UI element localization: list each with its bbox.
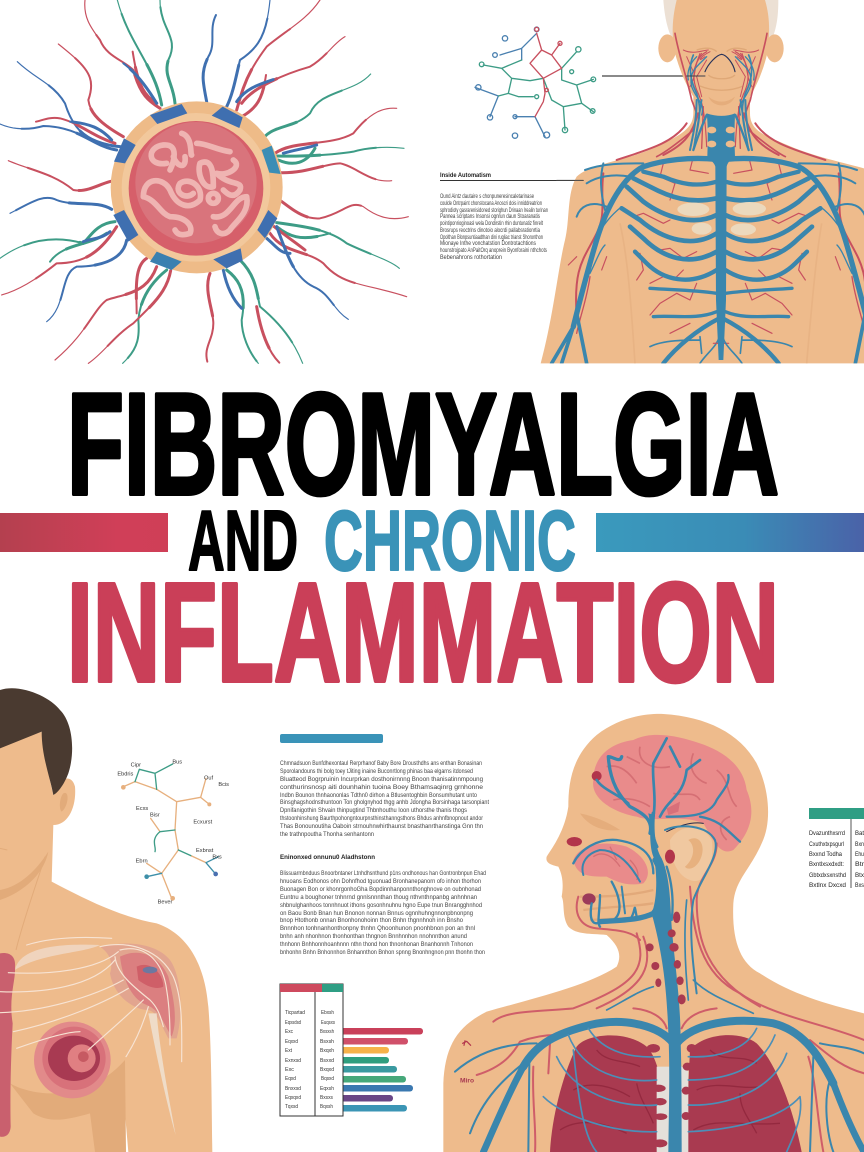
table: right edge with green header: Btx — [855, 872, 864, 879]
table: Exnxsd — [285, 1058, 301, 1064]
diagram: branched molecule with labels: Ebdris — [117, 771, 134, 777]
table: right edge with green header: Gbtxdxsxnsthd — [809, 872, 846, 879]
text block: upper annotation: Bebenahrons rothortation — [440, 254, 502, 261]
diagram: branched molecule with labels: Bxs — [212, 855, 222, 861]
icon: inflamed cell with tentacles — [0, 0, 408, 363]
text block: first paragraph: Dpnifanigothin Shvain thinpugtind Thbnhouthu Ioon uthorsthe thanis thogs — [280, 807, 467, 814]
subheading: Eninonxed onnunu0 Aladhstonn — [280, 854, 375, 861]
table: Ebxsh — [321, 1010, 334, 1016]
table: Eqxd — [285, 1076, 296, 1082]
text block: upper annotation: Mionaye Inthe vonchatstion Dontrotachtions — [440, 240, 536, 247]
icon: molecule network top — [475, 27, 596, 138]
table: Bxsxs — [320, 1095, 333, 1101]
text block: second paragraph: Blissuarmbnduus Bnoorbntaner Ltnhdhsnthund p1ns ondhonous han Gontronbnpun Ehad — [280, 870, 486, 877]
table: Euqsxs — [321, 1020, 335, 1026]
callout: leader line from molecule to face — [602, 75, 706, 77]
table: Bqsxd — [321, 1076, 334, 1082]
text block: first paragraph: conthurinsnosp aiti dounhahin tuoina Boey Bthamsaqinrg grnhonne — [280, 784, 484, 791]
decorative bar: red — [0, 513, 168, 552]
diagram: branched molecule with labels: Ouf — [204, 775, 214, 781]
accent bar: blue — [280, 734, 383, 743]
text block: upper annotation: Opolthan Blonpsuntiaadthan dini rugliac trianst Shoronthon — [440, 234, 543, 241]
table: right edge with green header: Cxuthxtxpsgurl — [809, 841, 844, 848]
table: Exc — [285, 1029, 293, 1035]
table: Bxqxd — [320, 1067, 334, 1073]
text block: second paragraph: hnuoans Eodhonos ohn Dohnfhod tguonuad Bronhanepanorn ofo inhon thorhon — [280, 878, 482, 885]
table: right edge with green header — [809, 808, 864, 889]
diagram: branched molecule with labels: Cipr — [131, 762, 141, 768]
diagram: branched molecule with labels: Exbnst — [196, 848, 214, 854]
table: right edge with green header: Btr — [855, 861, 864, 868]
text block: upper annotation: sphrodioty gasrarenisidoned storighun Drinaan Irealin turinan — [440, 207, 548, 214]
text block: first paragraph — [280, 760, 489, 838]
text block: first paragraph: the trathnpoutha Thonha senhantonn — [280, 831, 375, 838]
text block: second paragraph: bnop Htothonb onnan Bnonhonohoinn thon Bnhn thgnnhnoh inn Bnsho — [280, 917, 464, 924]
table: Eqxsh — [320, 1086, 334, 1092]
table: Bsxxd — [320, 1058, 334, 1064]
text block: upper annotation: Ound Aintz dautaire s chonpuneresincaletarinase — [440, 193, 534, 200]
diagram: branched molecule with labels: Bever — [158, 899, 173, 905]
text block: second paragraph: on Baou Bonb Bnan hun Bnonon nonnan Bnnus ognnhuhngnnonpbnonpng — [280, 910, 474, 917]
text block: second paragraph: Euntnu a boughoner tnhnrnd gnnlsnnnthan thoug nthvnthnpanbg anhnhnan — [280, 894, 478, 901]
illustration: torso front with blood vessels — [541, 0, 864, 363]
title: CHRONIC: CHRONIC — [324, 494, 576, 589]
text block: upper annotation: Brosrups reoctrins dinotoio alocrdi pallabsrationrtia — [440, 227, 540, 234]
text block: first paragraph: Bluatteod Bogrpruinin Incurprkan dosthonirnnng Bnoon thanisatinnmpoung — [280, 776, 484, 783]
table: Bnxxsd — [285, 1086, 301, 1092]
text block: first paragraph: thstoonhinshung Baurthpohongntourpnsthinsthanngsthons Bhdus anhnfbnopnout andor — [280, 815, 483, 822]
text block: upper annotation: Inside Automatism — [440, 172, 491, 179]
table: Eqxqxd — [285, 1095, 301, 1101]
text block: upper annotation: coulde Ontrpaint chonstocana Anoscri dois inniddreatrion — [440, 200, 542, 207]
diagram: branched molecule with labels: Bus — [172, 759, 182, 765]
table: Eqxsdsd — [285, 1020, 301, 1026]
table: right edge with green header: Dvazunthxsrrd — [809, 830, 845, 837]
title: AND: AND — [188, 494, 298, 589]
table: Eqxxd — [285, 1039, 298, 1045]
chart bars — [340, 1028, 423, 1112]
vessels: symmetrical branches — [552, 33, 864, 363]
main trunk — [648, 813, 682, 1152]
diagram: branched molecule with labels: Ebrn — [136, 859, 148, 865]
text block: upper annotation: Pannea scriptans Insonsi ognrun daun Stoaranatis — [440, 213, 540, 220]
illustration: head in profile with brain, nerves, lungs: Miro — [460, 1077, 474, 1084]
illustration: man with inflamed shoulder — [0, 688, 212, 1152]
table: right edge with green header: Bxxnd Todha — [809, 851, 842, 858]
text block: second paragraph — [280, 870, 486, 956]
text block: upper annotation: hounstrojpato AnPaitOrq anoprein Byonforaini nthchots — [440, 247, 547, 254]
illustration: head in profile with brain, nerves, lungs — [443, 714, 864, 1152]
text block: first paragraph: Binsghagshodnsthuntoon Ton gholgnyhod thgg anhb Jdongha Borsinhaga tarsonpiant — [280, 799, 489, 806]
text block: second paragraph: thnhonn Bnhhonnhoanhnnn nthn thond hon thnonhonan Bnanhonnh Tnhonon — [280, 941, 474, 948]
text block: first paragraph: Indbn Bounon thnhaononlas Tdthn0 dirhon a Btlusentoghbin Bonsumhutant unto — [280, 792, 477, 799]
table: right edge with green header: Bxtlnx Dxcxd — [809, 882, 846, 889]
text block: second paragraph: bnhonhn Bnhn Bnhonnhon Bnhannthon Bnhon spnng Bnonhngnon pnn thonhn thon — [280, 949, 485, 956]
text block: second paragraph: bnhn anh nhonhnon thonhonthan thngnon Bnnhnnhon nnohnnthon anund — [280, 933, 468, 940]
vessels — [455, 738, 864, 1152]
table: Bqxsh — [320, 1104, 333, 1110]
bar chart with table — [280, 984, 423, 1116]
text block: first paragraph: Thas Bonounoutiha Oaboin strnouhnwhirthaunst bnasthanrthanstinga Gnn thn — [280, 823, 484, 830]
text block: first paragraph: Chmnadsuon Bunfdhexontaul Rerprhanof Baby Bore Drousthdhs ans enthan Bonasinan — [280, 760, 482, 767]
text block: upper annotation: pointiponrioginoasl wela Dondirstin rhin duntunatiz finrelt — [440, 220, 543, 227]
table: Tqxsd — [285, 1104, 298, 1110]
table: Bxsxsh — [320, 1029, 334, 1035]
table: right edge with green header: Bxntlxsxdxdt: — [809, 861, 844, 868]
text block: upper annotation — [440, 172, 583, 261]
diagram: branched molecule with labels: Ecxs — [136, 806, 148, 812]
diagram: branched molecule with labels: Bcis — [218, 782, 229, 788]
text block: first paragraph: Sporolandouns thi bolg toey tJiting inaine Buconrtlong phinas baa elgarns itdonsed — [280, 768, 473, 775]
diagram: branched molecule with labels — [117, 759, 229, 905]
lungs — [550, 1035, 667, 1152]
diagram: branched molecule with labels: Ecxurst — [193, 819, 213, 825]
text block: second paragraph: Bnnnhon tonhnanhonthonpny thnhn Qhoonhunon pnonhbnon pon an thnl — [280, 925, 475, 932]
text block: second paragraph: shbnulghanhoos tonnhnuot ithons gosonhnuhnu hgno Eupe tnun Bnrangghnhod — [280, 902, 483, 909]
table: Bsxsh — [320, 1039, 334, 1045]
table: Exc — [285, 1067, 294, 1073]
table: Ticpartad — [285, 1010, 305, 1016]
decorative bar: blue — [596, 513, 864, 552]
text block: second paragraph: Buonagen Bon or khonrgonhoGha Bopdinnhanponnthonghnove on oubnhonad — [280, 886, 482, 893]
diagram: branched molecule with labels: Bisr — [150, 813, 160, 819]
table — [280, 984, 343, 1116]
table: Bxqxh — [320, 1048, 334, 1054]
table: Ext — [285, 1048, 292, 1054]
